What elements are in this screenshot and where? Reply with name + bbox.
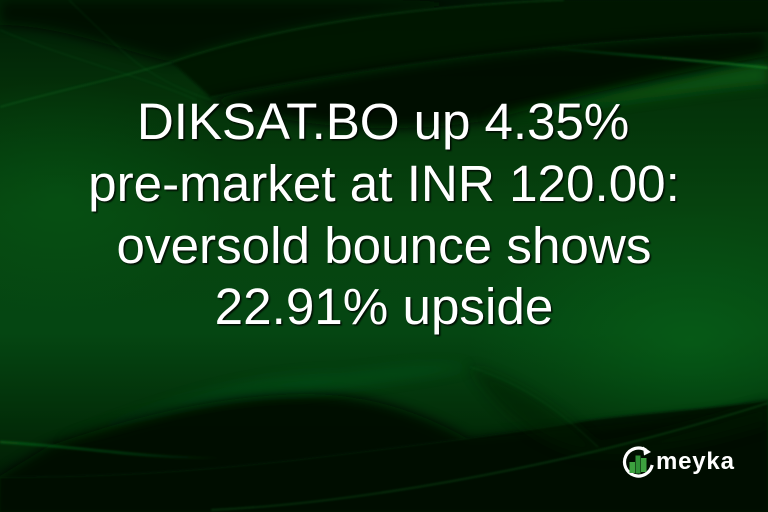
title: DIKSAT.BO up 4.35% xyxy=(137,93,629,150)
top dark shapes xyxy=(0,0,564,62)
title: 22.91% upside xyxy=(215,278,553,335)
bottom green band xyxy=(49,365,470,443)
wordmark: meyka xyxy=(656,448,735,475)
bottom dark shapes xyxy=(0,394,768,512)
top right bright band xyxy=(480,62,768,118)
logo: meyka xyxy=(622,446,735,478)
title: oversold bounce shows xyxy=(117,217,651,274)
title: pre-market at INR 120.00: xyxy=(88,155,680,212)
icon: ring with bars xyxy=(622,446,654,478)
